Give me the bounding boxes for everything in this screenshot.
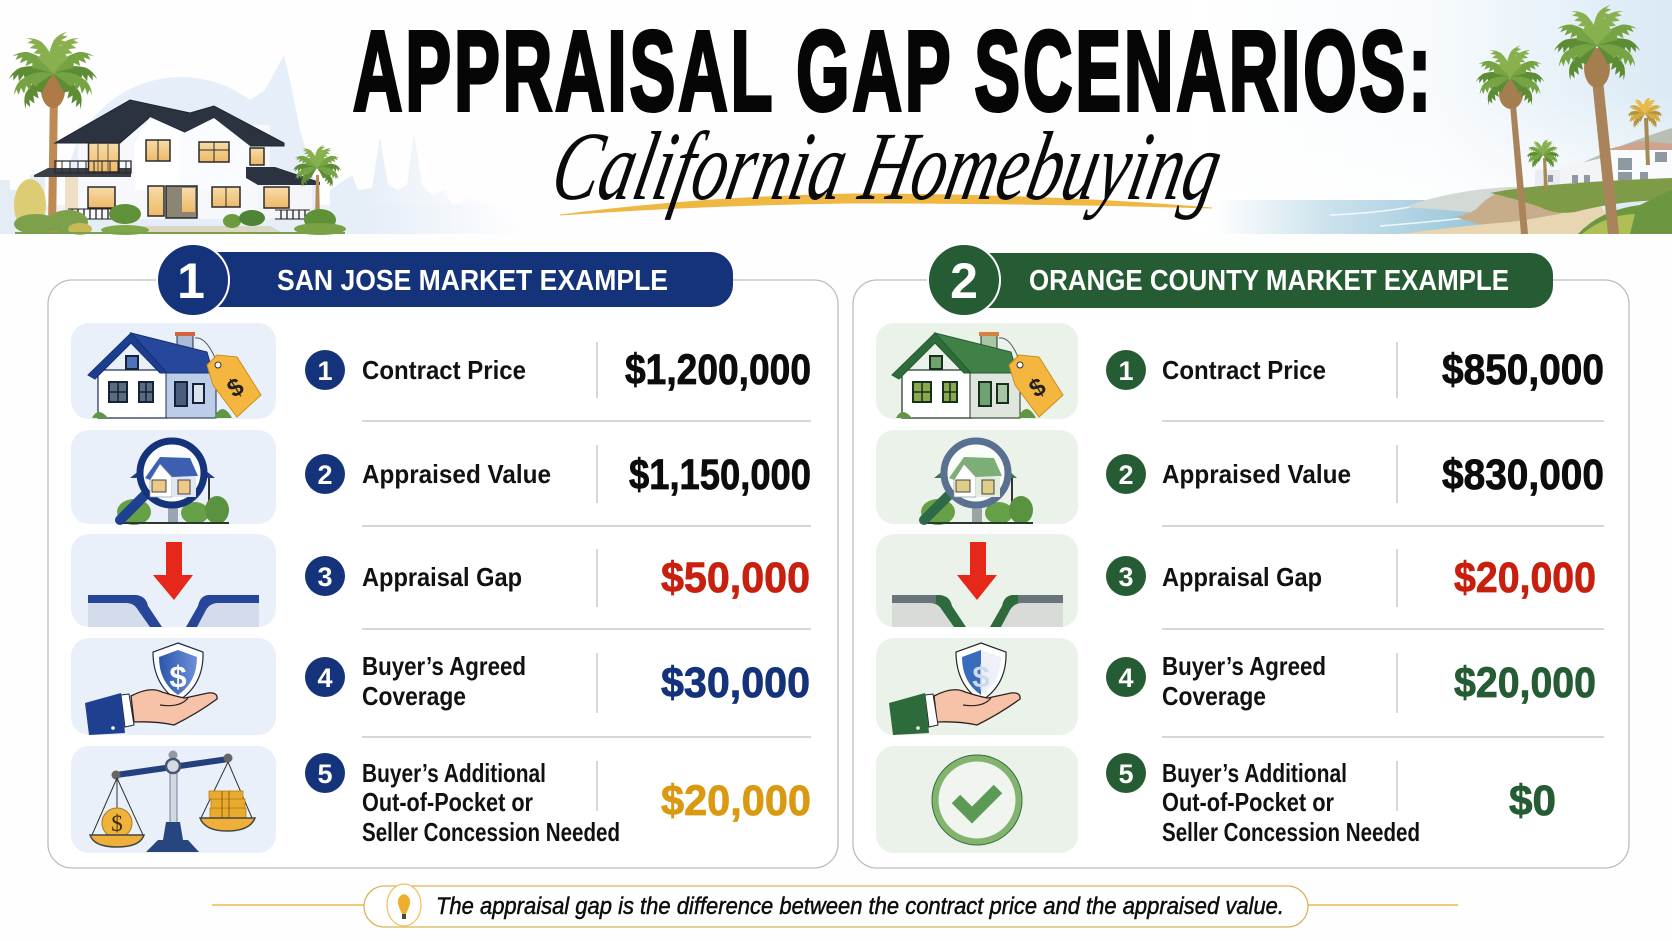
- coastal houses: [1535, 141, 1672, 192]
- section header bar: 1: [177, 253, 205, 309]
- row 5: additional out-of-pocket: Out-of-Pocket or: [362, 787, 533, 817]
- icon tile: green check mark: [876, 746, 1078, 853]
- icon tile: balance scale: $: [111, 811, 123, 836]
- section header bar: [157, 244, 733, 316]
- row 4: buyer's agreed coverage: Buyer’s Agreed: [1162, 651, 1326, 681]
- row 5: additional out-of-pocket: [1106, 753, 1556, 847]
- icon tile: magnifier over house: [876, 430, 1078, 525]
- row 3: appraisal gap: $20,000: [1454, 554, 1596, 602]
- row 4: buyer's agreed coverage: Coverage: [362, 681, 466, 711]
- skyline backdrop: [0, 55, 530, 234]
- section header bar: [928, 244, 1553, 316]
- row 3: appraisal gap: [305, 549, 810, 607]
- row 2: appraised value: Appraised Value: [1162, 459, 1351, 489]
- icon tile: gap arrow: [71, 534, 276, 627]
- row 4: buyer's agreed coverage: $30,000: [661, 659, 810, 707]
- row 2: appraised value: Appraised Value: [362, 459, 551, 489]
- icon tile: gap arrow: [876, 534, 1078, 627]
- row 1: contract price: [305, 342, 811, 398]
- row 4: buyer's agreed coverage: Buyer’s Agreed: [362, 651, 526, 681]
- row 3: appraisal gap: [1106, 549, 1596, 607]
- gold brush underline: [560, 194, 1212, 215]
- row 5: additional out-of-pocket: Seller Concession Needed: [362, 817, 620, 847]
- icon: light bulb: [387, 884, 421, 926]
- row 3: appraisal gap: 3: [1118, 562, 1134, 592]
- row 1: contract price: 1: [317, 356, 333, 386]
- row 5: additional out-of-pocket: $20,000: [661, 777, 811, 825]
- row 5: additional out-of-pocket: Seller Concession Needed: [1162, 817, 1420, 847]
- row 2: appraised value: $830,000: [1442, 451, 1604, 499]
- row 2: appraised value: [305, 445, 811, 503]
- subtitle: California Homebuying: [543, 113, 1231, 221]
- panel frame: [853, 280, 1629, 868]
- row 5: additional out-of-pocket: [305, 753, 811, 847]
- icon tile: house with price tag: $: [222, 372, 249, 403]
- row 1: contract price: $850,000: [1442, 346, 1604, 394]
- row 5: additional out-of-pocket: 5: [317, 759, 333, 789]
- right scene: coast with palms: [1190, 0, 1672, 234]
- palm tree: small right: [293, 144, 341, 223]
- row 3: appraisal gap: 3: [317, 562, 333, 592]
- section header bar: ORANGE COUNTY MARKET EXAMPLE: [1029, 265, 1509, 297]
- row 1: contract price: [1106, 342, 1604, 398]
- panel frame: [48, 280, 838, 868]
- icon tile: hand holding shield: $: [972, 659, 990, 694]
- house: [34, 100, 320, 234]
- icon tile: magnifier over house: [71, 430, 276, 525]
- panel: Orange County market example: [853, 244, 1629, 868]
- row 1: contract price: Contract Price: [362, 355, 526, 385]
- section header bar: 2: [950, 253, 978, 309]
- callout text: The appraisal gap is the difference between the contract price and the appraised value.: [436, 893, 1284, 920]
- icon tile: hand holding shield: $: [169, 659, 187, 694]
- row 1: contract price: Contract Price: [1162, 355, 1326, 385]
- row 4: buyer's agreed coverage: 4: [317, 663, 333, 693]
- header banner: [0, 0, 1672, 235]
- row 2: appraised value: $1,150,000: [629, 451, 811, 499]
- icon tile: house with price tag: [876, 323, 1078, 419]
- row 3: appraisal gap: Appraisal Gap: [362, 562, 522, 592]
- row 4: buyer's agreed coverage: 4: [1118, 663, 1134, 693]
- row 5: additional out-of-pocket: $0: [1509, 777, 1556, 825]
- section header bar: SAN JOSE MARKET EXAMPLE: [277, 265, 668, 297]
- row 4: buyer's agreed coverage: Coverage: [1162, 681, 1266, 711]
- row 3: appraisal gap: Appraisal Gap: [1162, 562, 1322, 592]
- row 4: buyer's agreed coverage: $20,000: [1454, 659, 1596, 707]
- left scene: skyline and house: [0, 31, 530, 235]
- row 1: contract price: 1: [1118, 356, 1134, 386]
- row 3: appraisal gap: $50,000: [661, 554, 810, 602]
- footer callout: [212, 884, 1458, 927]
- row 5: additional out-of-pocket: Out-of-Pocket or: [1162, 787, 1334, 817]
- row 5: additional out-of-pocket: 5: [1118, 759, 1134, 789]
- palm tree: left: [9, 31, 97, 234]
- icon tile: hand holding shield: [71, 638, 276, 735]
- row 4: buyer's agreed coverage: [305, 651, 810, 713]
- row 4: buyer's agreed coverage: [1106, 651, 1596, 713]
- row 2: appraised value: 2: [1118, 460, 1134, 490]
- icon tile: house with price tag: $: [1024, 372, 1051, 403]
- row 2: appraised value: 2: [317, 460, 333, 490]
- palm trees: coast: [1476, 4, 1663, 234]
- row 5: additional out-of-pocket: Buyer’s Additional: [1162, 758, 1347, 788]
- row 2: appraised value: [1106, 445, 1604, 503]
- icon tile: balance scale: [71, 746, 276, 853]
- row 1: contract price: $1,200,000: [625, 346, 811, 394]
- icon tile: house with price tag: [71, 323, 276, 419]
- row 5: additional out-of-pocket: Buyer’s Additional: [362, 758, 546, 788]
- icon tile: hand holding shield: [876, 638, 1078, 735]
- panel: San Jose market example: [48, 244, 838, 868]
- landscaping bushes: [14, 179, 346, 235]
